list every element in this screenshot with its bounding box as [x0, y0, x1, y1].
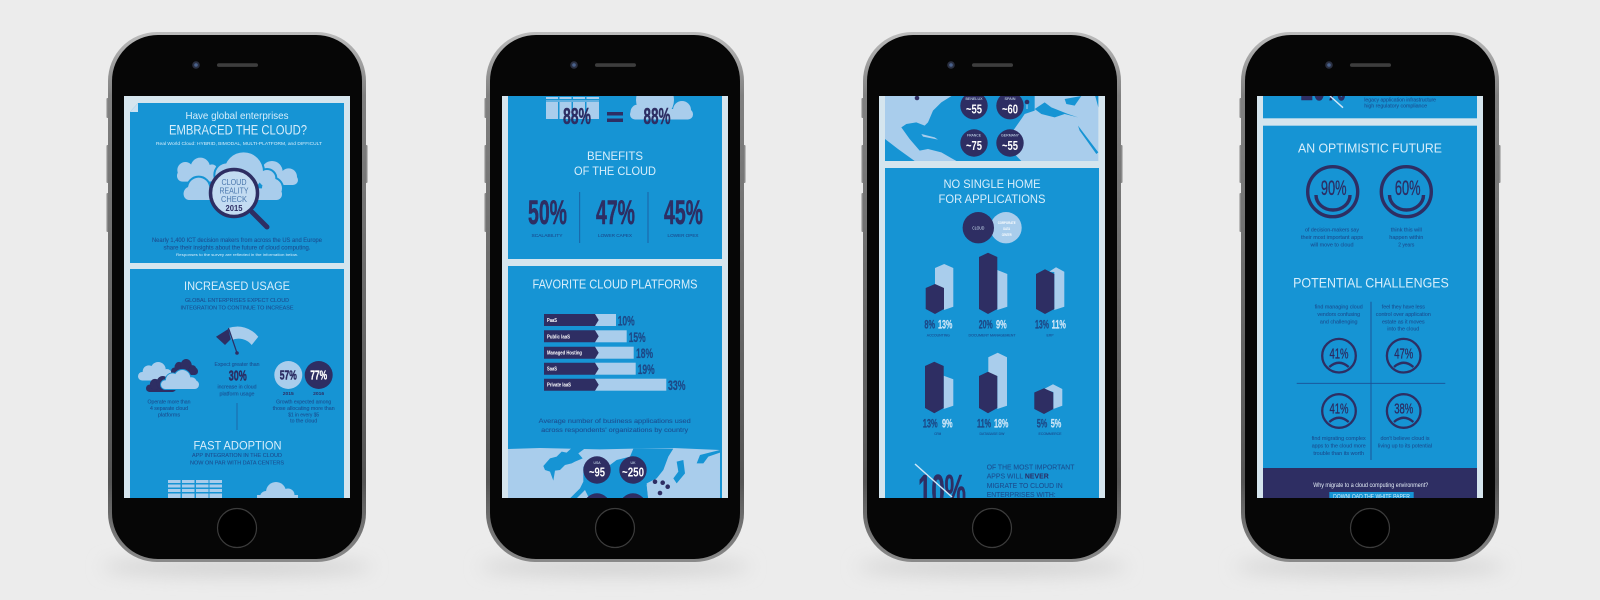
text: conditions — [1364, 97, 1436, 110]
bar: Private IaaS: 33% — [668, 377, 686, 393]
chart: database DW: 11% — [977, 419, 991, 431]
icon: cloud 88 percent: 88% — [644, 103, 670, 129]
text: most important apps: ENTERPRISES WITH: — [987, 492, 1056, 499]
bar: Private IaaS — [544, 378, 686, 391]
text: not living up: don't believe cloud is — [1380, 436, 1430, 442]
text: vendors confusing: and challenging — [1320, 320, 1358, 326]
text: separate platforms: platforms — [158, 412, 181, 418]
icon: smiley 60 percent: 60% — [1395, 177, 1421, 200]
subheading — [181, 298, 294, 310]
icon: smiley 90 percent: 90% — [1321, 177, 1347, 200]
chart: database DW: DATABASE DW — [980, 432, 1005, 436]
bar chart: platforms — [544, 312, 686, 393]
heading: benefits: OF THE CLOUD — [574, 164, 656, 178]
subheading: INTEGRATION TO CONTINUE TO INCREASE — [180, 306, 294, 312]
chart: CRM: 13% — [923, 419, 938, 431]
stat: 30 percent: increase in cloud — [218, 385, 256, 391]
text: conditions: high regulatory compliance — [1364, 104, 1427, 110]
intro text — [152, 238, 323, 257]
text: separate platforms: 4 separate cloud — [150, 406, 188, 412]
stat: 57 percent 2015 — [274, 361, 302, 396]
text: most important apps — [987, 464, 1075, 499]
phone 4 — [1235, 32, 1505, 575]
stat: 77 percent 2016: 77% — [310, 368, 327, 382]
bar: SaaS: 19% — [638, 361, 655, 377]
subheading: GLOBAL ENTERPRISES EXPECT CLOUD — [185, 298, 289, 304]
chart: database DW — [977, 353, 1008, 436]
phone 1 — [102, 32, 372, 575]
callout circles continuing below — [583, 493, 647, 521]
icon: smiley 90 percent — [1308, 167, 1358, 217]
callout: Benelux: BENELUX — [966, 97, 983, 101]
callout: USA — [583, 456, 611, 484]
text: growth expected: $1 in every $5 — [288, 412, 319, 418]
icon: sad face 41 percent: 41% — [1330, 345, 1348, 362]
text: less control: into the cloud — [1387, 327, 1419, 333]
text: growth expected — [273, 400, 335, 425]
heading: no single home — [938, 177, 1046, 206]
callout: Spain: SPAIN — [1004, 97, 1016, 101]
text: vendors confusing: find managing cloud — [1315, 304, 1363, 310]
button: download — [1329, 492, 1414, 502]
text: most important apps: APPS WILL NEVER — [987, 474, 1049, 481]
text: migrating complex apps: apps to the cloud more — [1312, 443, 1366, 449]
text: conditions: legacy application infrastructure — [1364, 97, 1436, 103]
heading: an optimistic future: AN OPTIMISTIC FUTURE — [1298, 141, 1442, 156]
bar: PaaS: PaaS — [547, 318, 558, 324]
intro text: Responses to the survey are reflected in the information below. — [176, 253, 298, 257]
bar: PaaS: 10% — [618, 312, 635, 328]
stat: lower capex: LOWER CAPEX — [598, 233, 632, 238]
stat: 30 percent — [214, 362, 260, 398]
heading: embraced the cloud: EMBRACED THE CLOUD? — [169, 122, 307, 138]
icon: servers 88 percent: 88% — [563, 103, 591, 129]
text: separate platforms — [148, 400, 191, 418]
chart: ecommerce: ECOMMERCE — [1038, 432, 1062, 436]
intro text: Nearly 1,400 ICT decision makers from across the US and Europe — [152, 238, 323, 244]
legend: DATA — [1003, 226, 1010, 231]
text: separate platforms: Operate more than — [148, 400, 191, 406]
bar: Managed Hosting: 18% — [636, 345, 653, 361]
callout: Spain: ~60 — [1002, 102, 1018, 116]
bar: Private IaaS: Private IaaS — [547, 383, 572, 389]
icon: four clouds — [138, 359, 199, 392]
chart: ERP: 13% — [1035, 319, 1049, 331]
map pins — [653, 479, 670, 500]
phone 3 — [857, 32, 1127, 575]
chart: accounting: 13% — [938, 319, 952, 331]
stat: 57 percent 2015: 2015 — [283, 391, 294, 396]
panel: ten percent continued — [1263, 61, 1477, 118]
chart: ecommerce: 5% — [1037, 419, 1047, 431]
icon: cloud — [257, 482, 298, 498]
subheading — [190, 453, 284, 464]
text: not living up: living up to its potential — [1378, 443, 1432, 449]
chart: accounting: ACCOUNTING — [927, 334, 950, 338]
heading: benefits — [574, 152, 656, 175]
icon: sad face 47 percent: 47% — [1394, 345, 1413, 362]
stat: 30 percent: Expect greater than — [214, 362, 260, 368]
text: growth expected: Growth expected among — [276, 400, 331, 406]
stat: 10 percent: 10% — [918, 466, 966, 515]
text: two years — [1389, 228, 1423, 249]
icon: servers — [168, 480, 222, 498]
stat: 10 percent — [915, 464, 966, 515]
stat: 10 percent bottom — [1300, 61, 1346, 110]
heading: no single home: FOR APPLICATIONS — [938, 192, 1046, 206]
chart: document management: 9% — [996, 319, 1007, 331]
icon: sad face 47 percent — [1387, 339, 1420, 373]
stat: scalability: 50% — [528, 194, 567, 232]
text: migrating complex apps — [1312, 436, 1366, 457]
stat: scalability — [528, 200, 567, 237]
icon: cloud 88 percent — [630, 96, 693, 124]
chart: accounting: 8% — [924, 319, 935, 331]
callout: France: ~75 — [966, 139, 982, 153]
chart: ecommerce: 5% — [1051, 419, 1061, 431]
text: growth expected: those allocating more than — [273, 406, 335, 412]
icon: sad face 41 percent lower: 41% — [1330, 400, 1348, 417]
text: decision makers: will move to cloud — [1310, 243, 1354, 249]
legend — [963, 212, 1022, 243]
text: average applications — [539, 418, 691, 434]
chart: database DW: 18% — [994, 419, 1008, 431]
heading: fast adoption: FAST ADOPTION — [194, 438, 282, 452]
text: decision makers — [1301, 228, 1363, 249]
panel: no single home — [885, 168, 1099, 515]
callout: Germany: GERMANY — [1001, 134, 1020, 138]
text: vendors confusing: vendors confusing — [1317, 312, 1360, 318]
text: migrating complex apps: find migrating complex — [1312, 436, 1366, 442]
text: vendors confusing — [1315, 304, 1363, 326]
stat: 57 percent 2015: 57% — [280, 368, 297, 382]
callout: Germany — [996, 129, 1024, 157]
subheading: APP INTEGRATION IN THE CLOUD — [192, 453, 282, 459]
bar: PaaS — [544, 314, 634, 326]
icon: clouds with magnifier — [177, 152, 298, 227]
heading: potential challenges: POTENTIAL CHALLENGES — [1293, 274, 1449, 290]
icon: servers 88 percent — [546, 97, 599, 124]
stat: lower opex — [664, 200, 703, 237]
text: average applications: Average number of business applications used — [539, 418, 691, 425]
icon: sad face 41 percent lower — [1322, 394, 1356, 428]
map: north atlantic top — [508, 448, 720, 500]
bar: Managed Hosting: Managed Hosting — [547, 351, 582, 357]
map: north atlantic bottom — [885, 94, 1098, 161]
callout: UK: UK — [630, 461, 636, 465]
footer call to action: Why migrate to a cloud computing environment? — [1313, 483, 1429, 489]
bar: Managed Hosting — [544, 346, 653, 359]
text: decision makers: their most important apps — [1301, 235, 1363, 241]
callout: USA: ~95 — [589, 466, 605, 480]
panel: embraced the cloud — [130, 103, 344, 263]
heading: benefits: BENEFITS — [587, 149, 643, 163]
panel: optimistic future and challenges — [1263, 126, 1477, 468]
bar: Public IaaS: Public IaaS — [547, 334, 571, 340]
legend: CORPORATE — [998, 220, 1016, 225]
chart: CRM: 9% — [942, 419, 953, 431]
icon: sad face 38 percent: 38% — [1394, 400, 1413, 417]
bar: SaaS: SaaS — [547, 367, 558, 373]
legend: CENTER — [1002, 232, 1012, 237]
text: decision makers: of decision-makers say — [1305, 228, 1359, 234]
callout: Benelux — [960, 92, 988, 119]
text: two years: happen within — [1389, 235, 1423, 241]
stat: lower capex — [596, 200, 635, 237]
callout: Benelux: ~55 — [966, 102, 982, 116]
heading: favorite cloud platforms: FAVORITE CLOUD PLATFORMS — [532, 278, 698, 292]
icon: sad face 41 percent — [1322, 339, 1356, 373]
chart: accounting — [924, 264, 953, 338]
text: most important apps: OF THE MOST IMPORTANT — [987, 464, 1075, 471]
bar: SaaS — [544, 362, 654, 375]
chart: ecommerce — [1034, 384, 1062, 436]
text: most important apps: MIGRATE TO CLOUD IN — [987, 483, 1063, 490]
chart: ERP — [1035, 267, 1066, 338]
chart: CRM — [923, 362, 953, 436]
icon: clouds with magnifier: 2015 — [226, 204, 243, 213]
bar: Public IaaS — [544, 330, 646, 342]
text: two years: think this will — [1391, 228, 1422, 234]
stat: scalability: SCALABILITY — [532, 233, 562, 238]
callout: France — [960, 129, 988, 157]
panel: favorite cloud platforms — [508, 266, 722, 521]
bar: Public IaaS: 15% — [629, 329, 646, 345]
icon: smiley 60 percent — [1381, 167, 1431, 217]
callout: USA: USA — [594, 461, 601, 465]
stat: 30 percent: platform usage — [220, 392, 254, 398]
callout: France: FRANCE — [967, 134, 982, 138]
chart: CRM: CRM — [934, 432, 941, 436]
legend: CLOUD — [972, 226, 985, 230]
stat: 10 percent bottom: 10% — [1300, 61, 1346, 110]
intro text: share their insights about the future of cloud computing. — [164, 246, 311, 252]
text: average applications: across respondents' organizations by country — [541, 427, 689, 434]
heading: have global enterprises: Have global enterprises — [186, 110, 288, 122]
stat: 30 percent: 30% — [229, 368, 247, 385]
button: download: DOWNLOAD THE WHITE PAPER — [1333, 495, 1410, 501]
heading: no single home: NO SINGLE HOME — [944, 177, 1040, 191]
text: less control — [1376, 304, 1431, 333]
icon: equals sign — [607, 112, 623, 122]
stat: 77 percent 2016: 2016 — [313, 391, 325, 396]
stat: 77 percent 2016 — [305, 361, 333, 396]
callout: Germany: ~55 — [1002, 139, 1018, 153]
text: less control: feel they have less — [1382, 304, 1425, 310]
subheading: Real World Cloud: HYBRID, BIMODAL, MULTI-PLATFORM, and DIFFICULT — [156, 141, 322, 146]
subheading: NOW ON PAR WITH DATA CENTERS — [190, 461, 284, 467]
text: less control: estate as it moves — [1382, 320, 1425, 326]
map pins — [915, 96, 1029, 109]
callout: Spain — [996, 92, 1024, 119]
stat: lower opex: 45% — [664, 194, 703, 232]
panel: increased usage — [130, 269, 344, 504]
text: growth expected: to the cloud — [290, 419, 317, 425]
icon: gauge — [216, 327, 258, 355]
text: migrating complex apps: trouble than its worth — [1313, 451, 1364, 457]
chart: document management — [968, 253, 1016, 338]
chart: ERP: ERP — [1046, 334, 1054, 338]
text: less control: control over application — [1376, 312, 1431, 318]
chart: document management: 20% — [979, 319, 993, 331]
chart: ERP: 11% — [1052, 319, 1066, 331]
text: two years: 2 years — [1398, 243, 1415, 249]
text: not living up — [1378, 436, 1432, 449]
stat: lower capex: 47% — [596, 194, 635, 232]
icon: clouds with magnifier: REALITY — [220, 186, 249, 196]
callout: UK: ~250 — [622, 466, 644, 480]
panel: benefits of the cloud — [508, 81, 722, 259]
icon: clouds with magnifier: CHECK — [221, 195, 248, 204]
icon: clouds with magnifier: CLOUD — [222, 178, 247, 187]
heading: increased usage: INCREASED USAGE — [184, 279, 290, 293]
footer call to action — [1263, 468, 1477, 502]
phone 2 — [480, 32, 750, 575]
callout: UK — [619, 456, 647, 484]
chart: document management: DOCUMENT MANAGEMENT — [968, 334, 1016, 338]
icon: sad face 38 percent — [1387, 394, 1420, 428]
stat: lower opex: LOWER OPEX — [668, 233, 698, 238]
